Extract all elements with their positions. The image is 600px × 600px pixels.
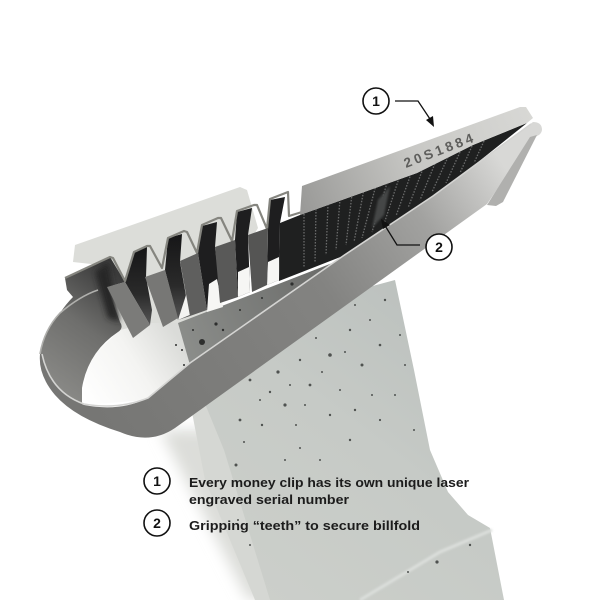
concrete pits bbox=[234, 299, 471, 573]
stand soft left shadow bbox=[160, 430, 268, 600]
slot 2 bbox=[165, 234, 190, 320]
inner curved surface of clip loop bbox=[40, 257, 125, 405]
slot 4 bbox=[235, 208, 252, 297]
slot 5 bbox=[267, 197, 285, 285]
concrete seen through loop bbox=[82, 323, 190, 405]
slot 4 light bottom bbox=[238, 267, 250, 297]
slot 3 light bottom bbox=[207, 279, 223, 312]
callout 1 circle: 1 bbox=[372, 93, 380, 109]
legend text 1: Every money clip has its own unique laser bbox=[189, 475, 469, 490]
serial number: 20S1884 bbox=[402, 130, 476, 171]
comb rim bbox=[65, 192, 302, 281]
stand back block bbox=[73, 187, 258, 340]
callout 2 marker bbox=[381, 219, 452, 260]
slot 5 light bottom bbox=[267, 257, 279, 285]
tooth ribs bbox=[304, 141, 484, 268]
gripping teeth plates bbox=[107, 228, 268, 338]
legend icon 1 bbox=[144, 468, 170, 494]
highlight on ribs bbox=[372, 186, 390, 228]
legend icon 1: 1 bbox=[153, 473, 161, 489]
legend text 2: Gripping “teeth” to secure billfold bbox=[189, 518, 420, 533]
slot 2 light bottom bbox=[178, 293, 192, 320]
legend icon 2 bbox=[144, 510, 170, 536]
concrete stand bbox=[73, 187, 504, 600]
concrete shadowed area under comb bbox=[178, 262, 335, 365]
slot 1 bbox=[125, 247, 152, 325]
arrow 2 bbox=[381, 219, 420, 245]
upper blade bbox=[300, 107, 533, 215]
rear bent tab bbox=[487, 135, 537, 206]
stand lower highlight ridge bbox=[360, 530, 492, 600]
tooth plate 5 bbox=[248, 228, 268, 292]
slots between teeth bbox=[125, 197, 285, 325]
money clip bbox=[40, 107, 542, 438]
arrow 1 bbox=[395, 101, 434, 127]
stand left side face bbox=[180, 350, 272, 600]
tooth plate 2 bbox=[145, 270, 178, 327]
slot 3 bbox=[198, 222, 222, 310]
dark ribbed inner panel with teeth bbox=[279, 123, 527, 281]
legend bbox=[144, 468, 469, 536]
legend text 1: engraved serial number bbox=[189, 492, 349, 507]
main clip band bbox=[40, 122, 542, 438]
tooth plate 4 bbox=[215, 240, 238, 303]
tooth plate 1 bbox=[107, 282, 150, 338]
stand front face bbox=[178, 280, 504, 600]
dark inner loop shadow bbox=[95, 262, 120, 322]
rim highlight on band bbox=[42, 124, 531, 406]
callout 1 marker bbox=[363, 88, 434, 127]
legend icon 2: 2 bbox=[153, 515, 161, 531]
loop inner rim bbox=[40, 290, 98, 354]
callout 2 circle: 2 bbox=[435, 239, 443, 255]
tooth plate 3 bbox=[180, 253, 207, 316]
